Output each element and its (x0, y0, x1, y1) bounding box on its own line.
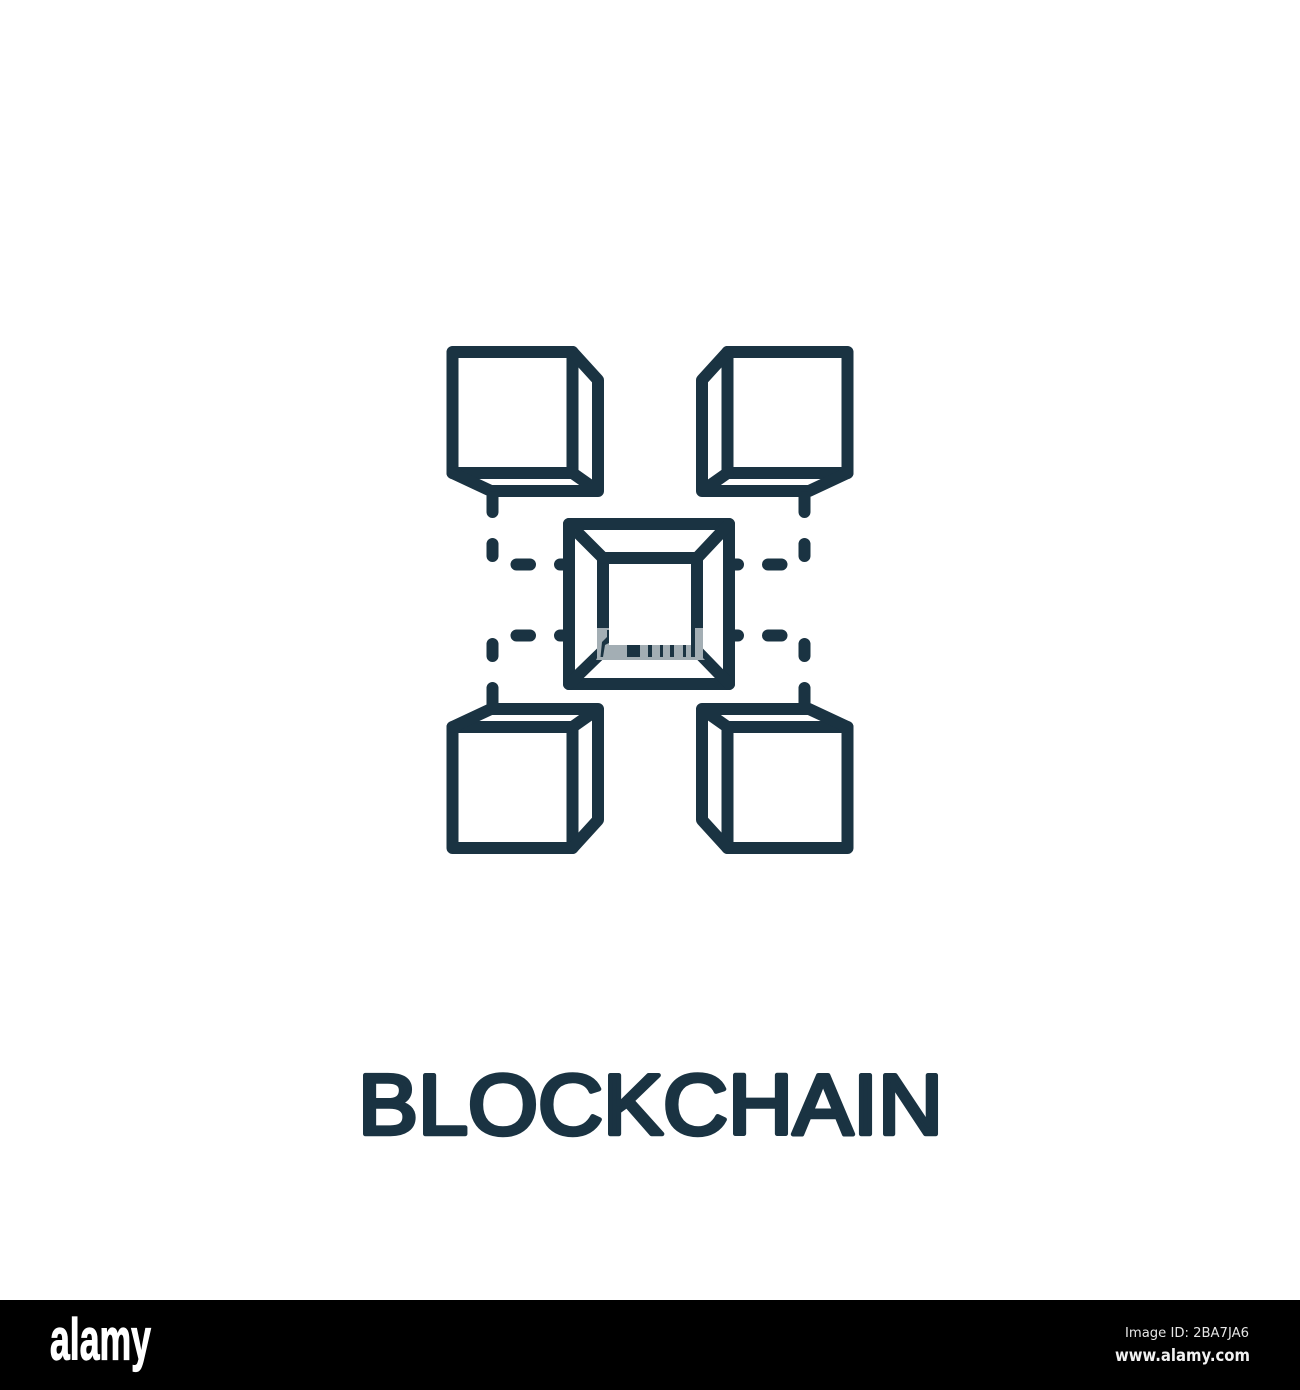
icon: dashed connectors (492, 497, 804, 705)
icon: bottom-left cube (452, 709, 598, 848)
watermark overlay on central block (596, 628, 705, 660)
footer bar (0, 1300, 1300, 1390)
footer logo: alamy (50, 1308, 151, 1372)
website: www.alamy.com (1115, 1346, 1250, 1365)
title: BLOCKCHAIN (358, 1058, 943, 1153)
icon: top-right cube (702, 352, 848, 491)
image id: Image ID: 2BA7JA6 (1125, 1325, 1249, 1341)
icon: central block (569, 524, 729, 684)
icon: top-left cube (452, 352, 598, 491)
icon: bottom-right cube (702, 709, 848, 848)
icon: blockchain network (452, 352, 848, 848)
